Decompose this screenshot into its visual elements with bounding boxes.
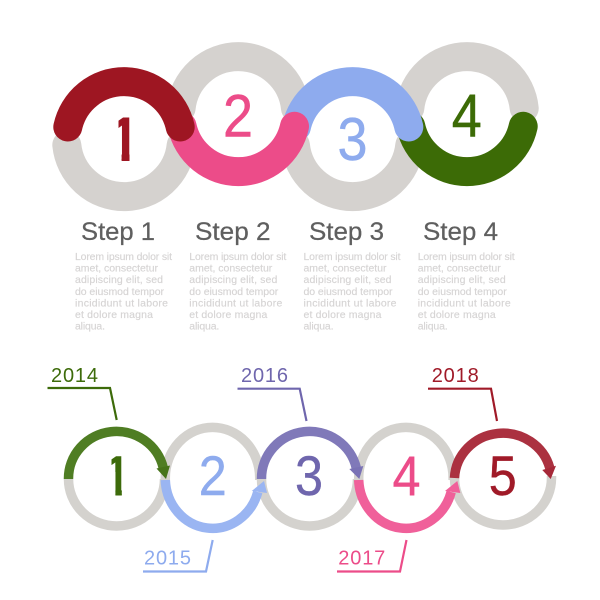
number 2: 2 [199, 444, 227, 507]
number 1: 1 [108, 106, 141, 173]
number 4: 4 [392, 444, 420, 507]
text block: step 3: Lorem ipsum dolor sit [304, 251, 401, 263]
text block: step 1: incididunt ut labore [75, 297, 168, 309]
text block: step 4: et dolore magna [418, 309, 496, 321]
callout: 2016: 2016 [241, 365, 288, 387]
bottom timeline chart [68, 427, 556, 528]
heading: step 3: Step 3 [309, 218, 384, 246]
arc: step 1 red [68, 82, 180, 127]
text block: step 4: Lorem ipsum dolor sit [418, 251, 515, 263]
heading: step 2: Step 2 [195, 218, 270, 246]
arrow: 2016 purple [261, 431, 363, 479]
heading: step 1: Step 1 [81, 218, 155, 246]
text block: step 3: adipiscing elit, sed [304, 274, 392, 286]
callout: 2014 [48, 365, 117, 420]
number 3: 3 [295, 444, 323, 507]
text block: step 2: incididunt ut labore [189, 297, 282, 309]
callout: 2016 [238, 365, 306, 421]
text block: step 2: aliqua. [189, 321, 219, 333]
top wave chart [67, 57, 524, 197]
arc: step 3 blue [296, 82, 409, 127]
text block: step 4: do eiusmod tempor [418, 286, 507, 298]
text block: step 2: et dolore magna [189, 309, 267, 321]
number 4: 4 [452, 82, 482, 150]
ring: timeline 3 gray [262, 479, 358, 526]
callout: 2015: 2015 [144, 548, 191, 570]
text block: step 3: amet, consectetur [304, 263, 387, 275]
ring: timeline 1 gray [68, 479, 164, 526]
step 4 column [418, 218, 515, 333]
arrow: 2018 red [454, 433, 556, 479]
callout: 2014: 2014 [51, 365, 98, 387]
ring: timeline 2 gray [165, 427, 260, 480]
text block: step 3: do eiusmod tempor [304, 286, 393, 298]
text block: step 4: amet, consectetur [418, 263, 501, 275]
number 3: 3 [338, 106, 368, 173]
arc: step 4 green [411, 126, 523, 172]
arrow: 2017 pink [359, 480, 460, 528]
text block: step 2: amet, consectetur [189, 263, 273, 275]
text block: step 1: et dolore magna [75, 309, 153, 321]
number 5: 5 [489, 444, 517, 507]
callout: 2018 [428, 365, 497, 421]
ring: step 2 gray [181, 57, 296, 108]
text block: step 1: Lorem ipsum dolor sit [75, 251, 172, 263]
text block: step 2: adipiscing elit, sed [189, 274, 277, 286]
number 1: 1 [102, 444, 133, 507]
text block: step 4: adipiscing elit, sed [418, 274, 506, 286]
ring: timeline 5 gray [454, 476, 552, 525]
text block: step 3: aliqua. [304, 321, 334, 333]
text block: step 4: aliqua. [418, 321, 448, 333]
ring: step 4 gray [410, 57, 524, 108]
step 3 column [304, 218, 401, 333]
callout: 2015 [143, 540, 213, 572]
text block: step 1: adipiscing elit, sed [75, 274, 163, 286]
arc: step 2 pink [182, 126, 294, 172]
heading: step 4: Step 4 [423, 218, 498, 246]
ring: step 3 gray [295, 145, 410, 197]
callout: 2018: 2018 [432, 365, 479, 387]
number 2: 2 [223, 82, 253, 150]
ring: timeline 4 gray [359, 427, 453, 480]
arrow: 2014 green [68, 431, 170, 479]
text block: step 3: incididunt ut labore [304, 297, 397, 309]
ring: step 1 gray [67, 145, 181, 197]
step 1 column [75, 218, 172, 333]
text block: step 2: Lorem ipsum dolor sit [189, 251, 286, 263]
callout: 2017: 2017 [338, 548, 385, 570]
step 2 column [189, 218, 286, 333]
text block: step 2: do eiusmod tempor [189, 286, 279, 298]
text block: step 3: et dolore magna [304, 309, 382, 321]
callout: 2017 [337, 540, 406, 572]
arrow: 2015 blue [165, 480, 267, 528]
text block: step 1: aliqua. [75, 321, 105, 333]
text block: step 1: do eiusmod tempor [75, 286, 164, 298]
text block: step 1: amet, consectetur [75, 263, 158, 275]
text block: step 4: incididunt ut labore [418, 297, 511, 309]
